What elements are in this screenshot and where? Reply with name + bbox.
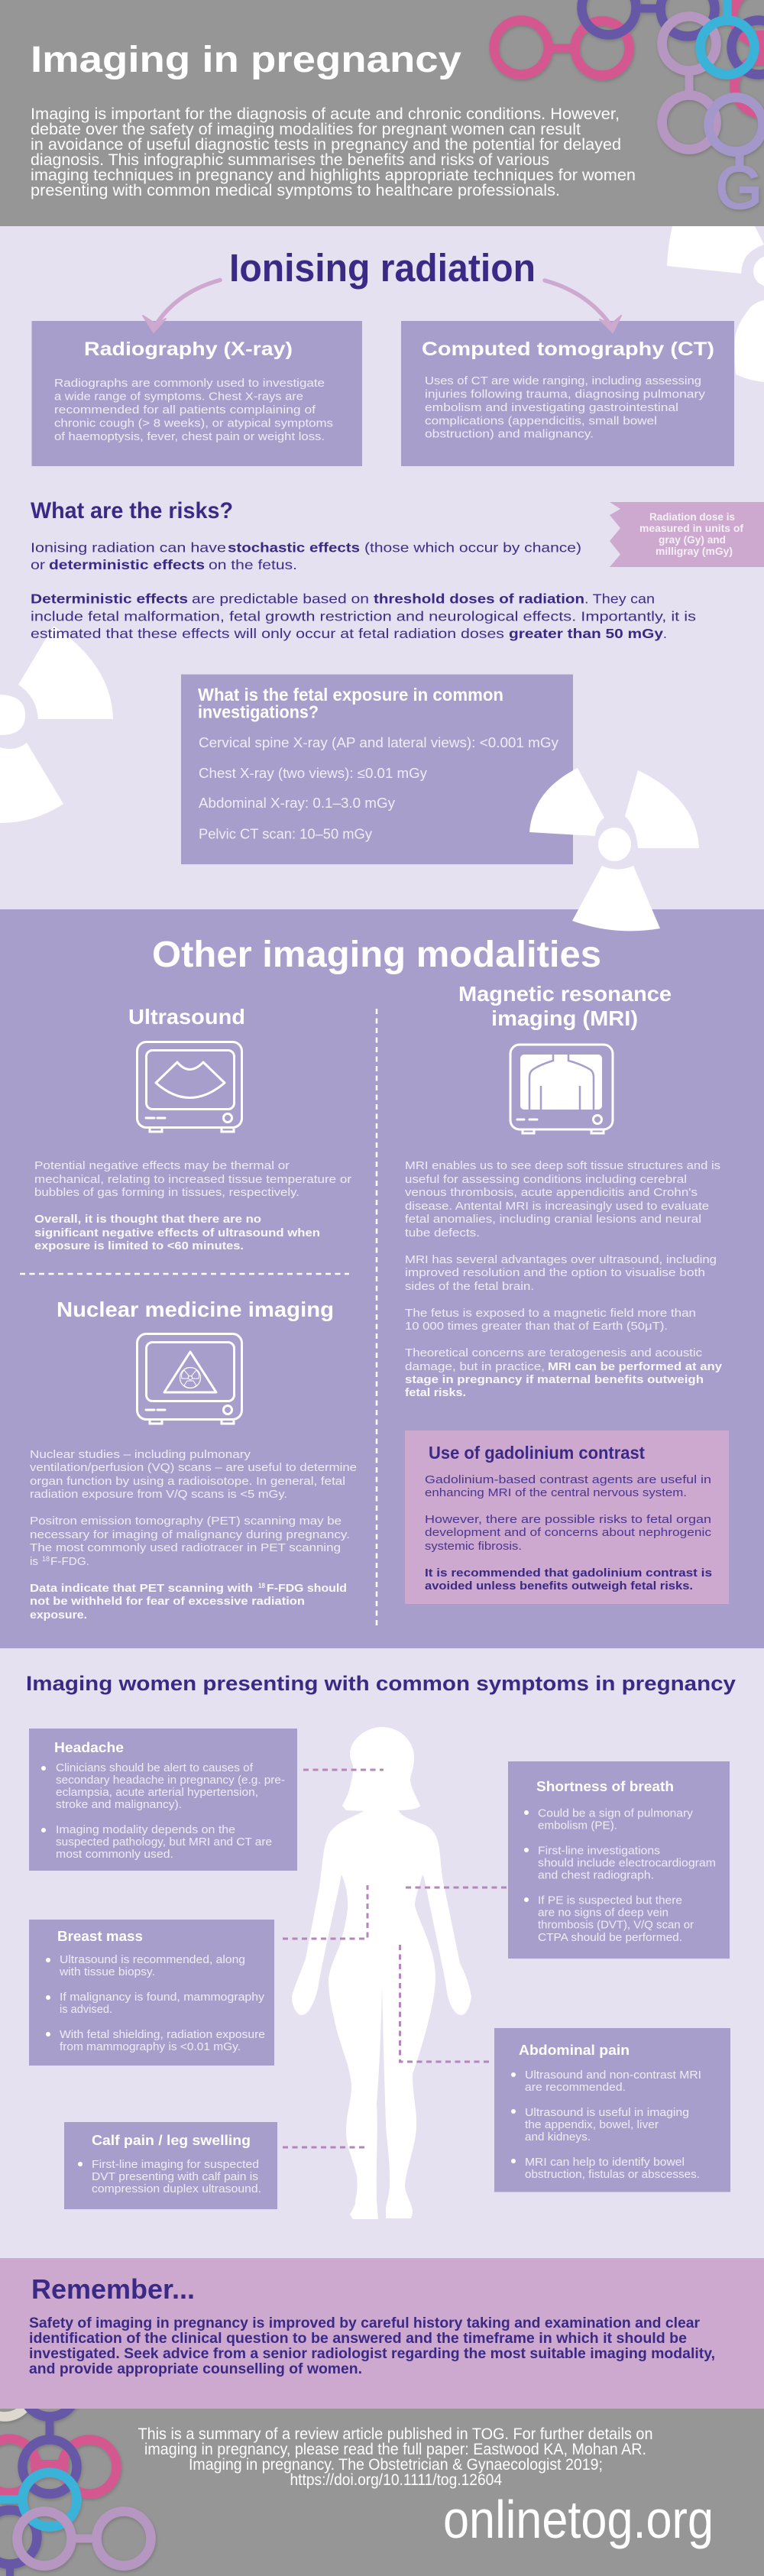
intro text	[31, 105, 636, 199]
exposure list: Pelvic CT scan: 10–50 mGy	[199, 827, 372, 842]
risks text: Ionising radiation can have	[31, 540, 226, 555]
radiography text: recommended for all patients complaining of	[54, 403, 316, 416]
intro text: in avoidance of useful diagnostic tests in pregnancy and the potential for delayed	[31, 136, 621, 154]
icon: ultrasound monitor	[138, 1042, 241, 1132]
panel: nuclear medicine imaging	[30, 1298, 357, 1622]
ultrasound text: Overall, it is thought that there are no	[34, 1213, 261, 1226]
remember text	[29, 2315, 715, 2377]
logo rings: TOG decoration: G	[716, 154, 762, 221]
gadolinium text: systemic fibrosis.	[425, 1540, 522, 1553]
risks text: (those which occur by chance)	[364, 540, 581, 555]
panel: headache	[29, 1729, 297, 1871]
citation text: https://doi.org/10.1111/tog.12604	[290, 2471, 502, 2489]
risks text: are predictable based on	[192, 591, 369, 607]
headache bullets: Imaging modality depends on the	[56, 1824, 235, 1836]
panel: imaging women presenting with common symptoms	[0, 1648, 764, 2258]
radiography text	[54, 377, 333, 443]
calf pain bullet: compression duplex ultrasound.	[92, 2183, 261, 2195]
intro text: diagnosis. This infographic summarises the benefits and risks of various	[31, 151, 549, 169]
icon: nuclear monitor	[138, 1334, 241, 1424]
heading: other imaging modalities: Other imaging modalities	[152, 935, 601, 975]
headache bullets	[41, 1762, 285, 1861]
nuclear medicine text: Nuclear studies – including pulmonary	[30, 1448, 251, 1461]
shortness of breath bullets	[524, 1808, 716, 1944]
MRI text: fetal anomalies, including cranial lesions and neural	[405, 1213, 701, 1226]
heading: ultrasound: Ultrasound	[128, 1005, 245, 1029]
icon: radiation symbol left	[0, 626, 113, 823]
MRI text: tube defects.	[405, 1226, 480, 1239]
shortness of breath bullets: should include electrocardiogram	[538, 1857, 716, 1869]
exposure list: Cervical spine X-ray (AP and lateral views): <0.001 mGy	[199, 735, 558, 750]
intro text: Imaging is important for the diagnosis of acute and chronic conditions. However,	[31, 105, 620, 123]
callout: radiation dose ribbon	[610, 502, 764, 567]
heading: remember: Remember...	[31, 2273, 195, 2305]
headache bullets: Clinicians should be alert to causes of	[56, 1762, 254, 1774]
MRI text: MRI enables us to see deep soft tissue structures and is	[405, 1159, 720, 1172]
panel: abdominal pain	[494, 2028, 730, 2192]
risks text: Deterministic effects	[31, 591, 188, 607]
gadolinium text	[425, 1473, 712, 1593]
panel: ultrasound	[34, 1005, 351, 1252]
arrow: left	[143, 280, 220, 332]
panel: use of gadolinium contrast	[405, 1431, 729, 1604]
CT text: obstruction) and malignancy.	[425, 428, 594, 440]
heading: breast mass: Breast mass	[57, 1929, 143, 1944]
heading: shortness of breath: Shortness of breath	[536, 1779, 674, 1794]
MRI text: useful for assessing conditions including cerebral	[405, 1173, 687, 1186]
panel: calf pain	[64, 2122, 277, 2209]
nuclear medicine text: The most commonly used radiotracer in PET scanning	[30, 1541, 341, 1554]
panel: header	[0, 0, 764, 226]
MRI text: disease. Antental MRI is increasingly used to evaluate	[405, 1200, 709, 1213]
callout: radiation dose ribbon: measured in units of	[639, 523, 744, 534]
risks text: .	[663, 626, 667, 641]
heading: calf pain: Calf pain / leg swelling	[92, 2133, 251, 2148]
remember text: Safety of imaging in pregnancy is improved by careful history taking and examination and clear	[29, 2315, 701, 2331]
panel: breast mass	[29, 1920, 274, 2066]
abdominal pain bullets: obstruction, fistulas or abscesses.	[525, 2169, 700, 2181]
panel: MRI	[405, 982, 729, 1604]
heading: gadolinium: Use of gadolinium contrast	[429, 1443, 645, 1463]
panel: footer	[0, 2409, 764, 2576]
CT text: injuries following trauma, diagnosing pulmonary	[425, 388, 706, 400]
ultrasound text: Potential negative effects may be thermal or	[34, 1159, 290, 1172]
heading: MRI: Magnetic resonance	[458, 982, 672, 1006]
heading: radiography: Radiography (X-ray)	[84, 339, 293, 360]
breast mass bullets: is advised.	[60, 2004, 112, 2016]
ultrasound text: exposure is limited to <60 minutes.	[34, 1239, 244, 1252]
gadolinium text: Gadolinium-based contrast agents are useful in	[425, 1473, 711, 1486]
gadolinium text: development and of concerns about nephrogenic	[425, 1526, 712, 1539]
calf pain bullet: DVT presenting with calf pain is	[92, 2171, 258, 2183]
risks text: . They can	[584, 591, 655, 607]
intro text: debate over the safety of imaging modalities for pregnant women can result	[31, 121, 581, 138]
panel: fetal exposure	[181, 674, 573, 864]
nuclear medicine text: organ function by using a radioisotope. In general, fetal	[30, 1475, 345, 1488]
heading: headache: Headache	[54, 1740, 124, 1755]
MRI text: improved resolution and the option to visualise both	[405, 1266, 705, 1279]
arrow: right	[545, 280, 621, 332]
calf pain bullet	[78, 2159, 261, 2195]
exposure list: Abdominal X-ray: 0.1–3.0 mGy	[199, 795, 395, 811]
heading: nuclear medicine imaging: Nuclear medicine imaging	[57, 1298, 334, 1321]
risks text: include fetal malformation, fetal growth restriction and neurological effects. Importantly, it is	[31, 608, 696, 624]
nuclear medicine text: 18	[42, 1555, 50, 1563]
heading: MRI	[458, 982, 672, 1030]
heading: CT: Computed tomography (CT)	[422, 339, 714, 360]
risks text: stochastic effects	[228, 540, 360, 555]
panel: computed tomography	[401, 321, 734, 466]
MRI text: sides of the fetal brain.	[405, 1280, 534, 1293]
nuclear medicine text: Data indicate that PET scanning with	[30, 1582, 253, 1595]
MRI text: stage in pregnancy if maternal benefits outweigh	[405, 1373, 704, 1386]
citation text	[138, 2425, 652, 2489]
gadolinium text: enhancing MRI of the central nervous system.	[425, 1486, 687, 1499]
exposure list: Chest X-ray (two views): ≤0.01 mGy	[199, 766, 427, 781]
citation text: This is a summary of a review article published in TOG. For further details on	[138, 2425, 652, 2443]
remember text: investigated. Seek advice from a senior radiologist regarding the most suitable imaging modality,	[29, 2346, 715, 2362]
radiography text: Radiographs are commonly used to investigate	[54, 377, 325, 390]
intro text: presenting with common medical symptoms to healthcare professionals.	[31, 182, 560, 199]
title: Imaging in pregnancy	[31, 40, 461, 80]
icon: radiation symbol lower right	[529, 768, 699, 931]
abdominal pain bullets: Ultrasound is useful in imaging	[525, 2107, 689, 2119]
abdominal pain bullets: and kidneys.	[525, 2131, 591, 2143]
citation text: Imaging in pregnancy. The Obstetrician & Gynaecologist 2019;	[189, 2456, 603, 2474]
remember text: identification of the clinical question to be answered and the timeframe in which it should be	[29, 2331, 687, 2347]
risks text: deterministic effects	[49, 557, 205, 572]
shortness of breath bullets: embolism (PE).	[538, 1820, 617, 1832]
risks text: or	[31, 557, 45, 572]
headache bullets: secondary headache in pregnancy (e.g. pre-	[56, 1774, 285, 1787]
ultrasound text: mechanical, relating to increased tissue temperature or	[34, 1173, 351, 1186]
MRI text: MRI has several advantages over ultrasound, including	[405, 1253, 717, 1266]
heading: fetal exposure: investigations?	[198, 702, 319, 721]
nuclear medicine text: ventilation/perfusion (VQ) scans – are useful to determine	[30, 1461, 357, 1474]
callout: radiation dose ribbon: Radiation dose is	[649, 511, 735, 523]
MRI text: Theoretical concerns are teratogenesis and acoustic	[405, 1346, 703, 1359]
MRI text: 10 000 times greater than that of Earth (50μT).	[405, 1320, 668, 1333]
shortness of breath bullets: CTPA should be performed.	[538, 1932, 682, 1944]
citation text: imaging in pregnancy, please read the full paper: Eastwood KA, Mohan AR.	[144, 2441, 646, 2458]
nuclear medicine text: Positron emission tomography (PET) scanning may be	[30, 1515, 342, 1528]
CT text	[425, 374, 706, 440]
panel: remember	[0, 2258, 764, 2409]
heading: fetal exposure: What is the fetal exposure in common	[198, 685, 503, 705]
abdominal pain bullets: are recommended.	[525, 2082, 626, 2094]
headache bullets: suspected pathology, but MRI and CT are	[56, 1836, 272, 1849]
gadolinium text: avoided unless benefits outweigh fetal risks.	[425, 1580, 693, 1593]
callout: radiation dose ribbon: milligray (mGy)	[656, 546, 733, 557]
breast mass bullets: with tissue biopsy.	[59, 1966, 155, 1978]
heading: ionising radiation: Ionising radiation	[229, 246, 536, 290]
breast mass bullets: Ultrasound is recommended, along	[60, 1954, 245, 1966]
nuclear medicine text: F-FDG should	[267, 1582, 347, 1595]
shortness of breath bullets: Could be a sign of pulmonary	[538, 1808, 694, 1820]
heading: MRI: imaging (MRI)	[491, 1006, 638, 1030]
nuclear medicine text	[30, 1448, 357, 1622]
intro text: imaging techniques in pregnancy and highlights appropriate techniques for women	[31, 167, 636, 184]
shortness of breath bullets: First-line investigations	[538, 1845, 660, 1857]
nuclear medicine text: F-FDG.	[50, 1555, 89, 1568]
risks text: estimated that these effects will only occur at fetal radiation doses	[31, 626, 504, 641]
figure: female silhouette	[292, 1727, 471, 2219]
risks text: threshold doses of radiation	[374, 591, 584, 607]
radiography text: of haemoptysis, fever, chest pain or weight loss.	[54, 430, 325, 443]
radiography text: a wide range of symptoms. Chest X-rays are	[54, 390, 303, 403]
radiography text: chronic cough (> 8 weeks), or atypical symptoms	[54, 417, 333, 429]
MRI text: damage, but in practice,	[405, 1360, 545, 1373]
heading: symptoms: Imaging women presenting with common symptoms in pregnancy	[26, 1672, 736, 1695]
logo rings: footer decoration	[0, 2409, 157, 2576]
nuclear medicine text: not be withheld for fear of excessive radiation	[30, 1595, 305, 1608]
shortness of breath bullets: are no signs of deep vein	[538, 1907, 668, 1920]
shortness of breath bullets: thrombosis (DVT), V/Q scan or	[538, 1920, 694, 1932]
nuclear medicine text: is	[30, 1555, 38, 1568]
risks text: greater than 50 mGy	[509, 626, 663, 641]
panel: shortness of breath	[508, 1761, 730, 1959]
heading: abdominal pain: Abdominal pain	[519, 2043, 630, 2058]
panel: ionising radiation	[0, 226, 764, 931]
shortness of breath bullets: and chest radiograph.	[538, 1869, 654, 1881]
nuclear medicine text: necessary for imaging of malignancy during pregnancy.	[30, 1528, 350, 1541]
risks text: on the fetus.	[209, 557, 297, 572]
CT text: complications (appendicitis, small bowel	[425, 414, 657, 428]
icon: MRI monitor	[510, 1045, 613, 1133]
CT text: embolism and investigating gastrointestinal	[425, 401, 678, 414]
gadolinium text: It is recommended that gadolinium contrast is	[425, 1567, 712, 1580]
headache bullets: stroke and malignancy).	[56, 1799, 182, 1811]
icon: radiation symbol top right	[667, 226, 764, 382]
ultrasound text: bubbles of gas forming in tissues, respectively.	[34, 1186, 299, 1199]
MRI text: The fetus is exposed to a magnetic field more than	[405, 1307, 696, 1320]
breast mass bullets: from mammography is <0.01 mGy.	[60, 2041, 241, 2053]
breast mass bullets	[46, 1954, 265, 2053]
risks text	[31, 540, 696, 641]
MRI text: fetal risks.	[405, 1386, 466, 1399]
breast mass bullets: If malignancy is found, mammography	[60, 1991, 265, 2004]
exposure list	[199, 735, 558, 842]
gadolinium text: However, there are possible risks to fetal organ	[425, 1513, 711, 1526]
ultrasound text	[34, 1159, 351, 1252]
website url: onlinetog.org	[443, 2490, 714, 2549]
nuclear medicine text: 18	[258, 1582, 265, 1589]
callout: radiation dose ribbon: gray (Gy) and	[659, 534, 726, 546]
panel: other imaging modalities	[0, 909, 764, 1648]
abdominal pain bullets: the appendix, bowel, liver	[525, 2119, 659, 2131]
shortness of breath bullets: If PE is suspected but there	[538, 1895, 682, 1907]
MRI text: MRI can be performed at any	[548, 1360, 723, 1373]
remember text: and provide appropriate counselling of women.	[29, 2361, 362, 2377]
headache bullets: eclampsia, acute arterial hypertension,	[56, 1787, 258, 1799]
nuclear medicine text: exposure.	[30, 1609, 87, 1622]
CT text: Uses of CT are wide ranging, including assessing	[425, 374, 701, 387]
calf pain bullet: First-line imaging for suspected	[92, 2159, 259, 2171]
abdominal pain bullets: Ultrasound and non-contrast MRI	[525, 2069, 701, 2082]
ultrasound text: significant negative effects of ultrasound when	[34, 1226, 320, 1239]
abdominal pain bullets	[511, 2069, 701, 2181]
logo rings: TOG decoration	[494, 0, 764, 221]
nuclear medicine text: radiation exposure from V/Q scans is <5 mGy.	[30, 1488, 287, 1501]
heading: fetal exposure	[198, 685, 503, 721]
abdominal pain bullets: MRI can help to identify bowel	[525, 2156, 685, 2169]
MRI text: venous thrombosis, acute appendicitis and Crohn's	[405, 1186, 698, 1199]
headache bullets: most commonly used.	[56, 1849, 173, 1861]
breast mass bullets: With fetal shielding, radiation exposure	[60, 2029, 265, 2041]
heading: what are the risks: What are the risks?	[31, 498, 233, 523]
MRI text	[405, 1159, 723, 1399]
panel: radiography	[32, 321, 362, 466]
